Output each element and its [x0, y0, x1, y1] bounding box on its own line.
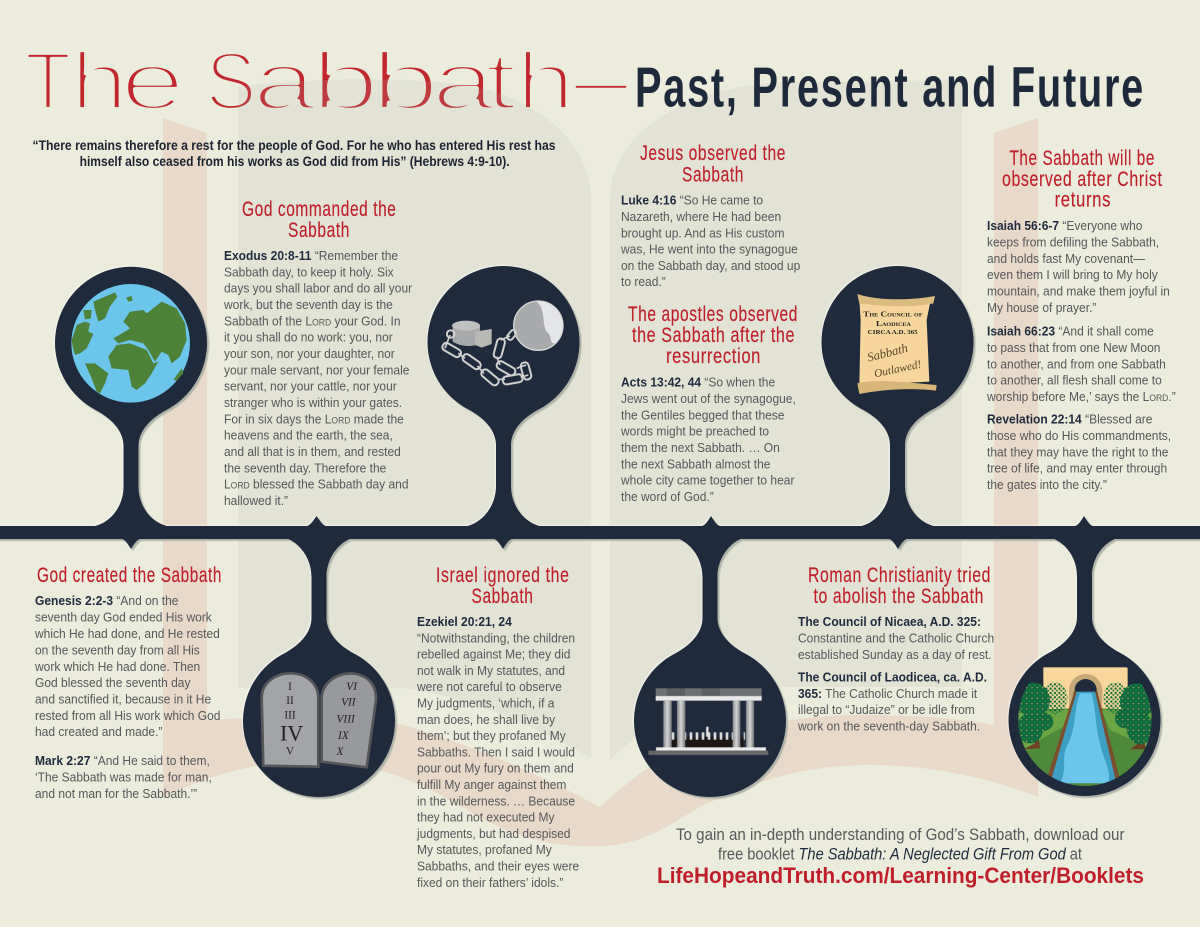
verses: hallowed it.”: [224, 493, 288, 508]
heading: God commanded the: [242, 198, 396, 221]
verses: to read.”: [621, 274, 666, 289]
verses: rebelled against Me; they did: [417, 647, 570, 662]
verses: heavens and the earth, the sea,: [224, 428, 393, 443]
icon: scroll: [857, 294, 937, 394]
verses: and holds fast My covenant—: [987, 251, 1145, 266]
verses: which He had done, and He rested: [34, 626, 220, 641]
verses: Sabbaths. Then I said I would: [417, 745, 575, 760]
panel: God commanded the Sabbath: [223, 198, 412, 508]
icon: garden with river: [1018, 667, 1152, 786]
verses: 365: The Catholic Church made it: [798, 686, 978, 701]
verses: God blessed the seventh day: [35, 675, 191, 690]
icon: temple with crowd: [648, 688, 768, 755]
heading: [242, 198, 396, 242]
verses: to another, all flesh shall come to: [987, 373, 1162, 388]
verses: and not man for the Sabbath.’”: [35, 786, 197, 801]
verses: man does, he shall live by: [417, 712, 556, 727]
verses: stranger who is within your gates.: [224, 395, 402, 410]
bubble: church: [634, 536, 786, 797]
verses: them the next Sabbath. … On: [621, 440, 780, 455]
verses: Luke 4:16 “So He came to: [621, 193, 763, 208]
verses: [620, 375, 796, 504]
heading: Sabbath: [472, 585, 534, 608]
verses: Lord blessed the Sabbath day and: [224, 477, 409, 492]
verses: was, He went into the synagogue: [620, 242, 798, 257]
verses: [797, 614, 994, 734]
decorative book left page: [238, 79, 591, 758]
heading: Jesus observed the: [640, 142, 786, 165]
verses: [620, 193, 800, 289]
verses: Mark 2:27 “And He said to them,: [35, 753, 210, 768]
title: The Sabbath: t: [485, 36, 517, 127]
verses: they had not executed My: [417, 810, 555, 825]
verses: keeps from defiling the Sabbath,: [987, 235, 1159, 250]
scripture quote: himself also ceased from his works as God did from His” (Hebrews 4:9-10).: [80, 153, 510, 169]
scripture quote: “There remains therefore a rest for the people of God. For he who has entered His rest has: [32, 137, 556, 153]
icon: ten commandments tablets: VIII: [337, 713, 356, 725]
verses: that they may have the right to the: [987, 445, 1168, 459]
verses: ‘The Sabbath was made for man,: [35, 770, 212, 785]
heading: returns: [1055, 189, 1111, 212]
icon: ten commandments tablets: V: [286, 745, 295, 757]
verses: even them I will bring to My holy: [987, 268, 1158, 282]
verses: My house of prayer.”: [987, 300, 1096, 315]
verses: mountain, and make them joyful in: [987, 284, 1170, 299]
heading: Israel ignored the: [436, 564, 570, 587]
panel: Roman Christianity tried to abolish the Sabbath: [797, 564, 994, 734]
timeline bar: [0, 526, 1200, 539]
verses: on the seventh day from all His: [35, 643, 200, 658]
verses: Jews went out of the synagogue,: [621, 391, 796, 406]
title: The Sabbath: e: [120, 36, 185, 127]
bubble: creation: [55, 267, 207, 527]
bubble: tablets: [243, 536, 395, 797]
icon: ten commandments tablets: VI: [346, 681, 358, 693]
timeline with bubbles: [0, 266, 1200, 797]
verses: the word of God.”: [621, 489, 714, 504]
verses: Sabbaths, and their eyes were: [417, 859, 579, 874]
verses: had created and made.”: [35, 724, 162, 739]
verses: tree of life, and may enter through: [987, 461, 1167, 476]
verses: Nazareth, where He had been: [621, 209, 781, 224]
heading: The apostles observed: [628, 303, 798, 326]
verses: judgments, but had despised: [416, 826, 570, 841]
verses: them’; but they profaned My: [417, 729, 566, 743]
verses: servant, nor your cattle, nor your: [224, 379, 397, 394]
verses: not walk in My statutes, and: [417, 663, 565, 678]
verses: fulfill My anger against them: [417, 777, 566, 792]
title: The Sabbath: b: [371, 35, 439, 127]
heading: [436, 564, 570, 608]
verses: Constantine and the Catholic Church: [798, 631, 994, 646]
verses: words might be preached to: [620, 424, 769, 439]
icon: ball and chain: [441, 301, 563, 387]
icon: ten commandments tablets: IX: [337, 730, 350, 742]
bubble: commandment: [428, 266, 580, 527]
heading: [640, 142, 786, 187]
heading: [628, 303, 798, 368]
panel: The apostles observed the Sabbath: [620, 303, 798, 504]
verses: in the wilderness. … Because: [417, 794, 575, 808]
verses: illegal to “Judaize” or be idle from: [798, 702, 975, 717]
heading: Sabbath: [288, 219, 350, 242]
verses: [34, 593, 220, 801]
icon: scroll: The Council of: [863, 310, 923, 319]
heading: God created the Sabbath: [37, 564, 222, 587]
verses: The Council of Laodicea, ca. A.D.: [798, 670, 987, 685]
verses: Sabbath of the Lord your God. In: [224, 314, 401, 328]
verses: the seventh day. Therefore the: [224, 461, 386, 475]
title: The Sabbath: h: [516, 35, 575, 127]
icon: ten commandments tablets: III: [284, 709, 296, 721]
verses: your son, nor your daughter, nor: [224, 346, 395, 361]
verses: Sabbath day, to keep it holy. Six: [224, 265, 394, 279]
title: The Sabbath: a: [252, 35, 317, 127]
panel: Israel ignored the Sabbath: [416, 564, 579, 890]
bubble: Laodicea: [822, 266, 974, 527]
verses: to pass that from one New Moon: [987, 340, 1160, 355]
icon: scroll: Outlawed!: [873, 359, 923, 380]
heading: Sabbath: [682, 164, 744, 187]
icon: ten commandments tablets: [262, 673, 376, 767]
heading: [1002, 147, 1162, 212]
verses: My statutes, profaned My: [417, 843, 552, 857]
verses: were not careful to observe: [416, 680, 562, 694]
title: The Sabbath: a: [432, 35, 496, 127]
panel: Jesus observed the Sabbath: [620, 142, 800, 289]
verses: “Notwithstanding, the children: [417, 631, 575, 645]
verses: those who do His commandments,: [987, 428, 1171, 443]
scripture quote: [32, 137, 556, 169]
icon: scroll: CIRCA A.D. 365: [868, 329, 918, 336]
verses: your male servant, nor your female: [224, 363, 409, 377]
verses: brought up. And as His custom: [621, 226, 784, 240]
decorative open book peach outline: [163, 118, 1038, 846]
verses: seventh day God ended His work: [35, 610, 212, 625]
heading: to abolish the Sabbath: [814, 585, 984, 608]
panel: The Sabbath will be observed after Christ returns: [986, 147, 1176, 492]
verses: work on the seventh-day Sabbath.: [797, 719, 980, 734]
verses: the gates into the city.”: [987, 477, 1107, 492]
heading: resurrection: [666, 345, 761, 368]
decorative book right page: [610, 80, 962, 760]
verses: the next Sabbath almost the: [621, 457, 770, 471]
verses: and all that is in them, and rested: [224, 444, 401, 459]
booklet link: LifeHopeandTruth.com/Learning-Center/Booklets: [657, 863, 1144, 888]
title: The Sabbath: T: [25, 35, 71, 126]
verses: Exodus 20:8-11 “Remember the: [224, 248, 398, 263]
verses: to another, and from one Sabbath: [987, 357, 1166, 371]
icon: ten commandments tablets: I: [288, 681, 292, 693]
heading: [808, 564, 991, 608]
call to action: [657, 826, 1144, 888]
verses: on the Sabbath day, and stood up: [621, 258, 800, 273]
cusps on bar: [117, 516, 1098, 549]
verses: Isaiah 56:6-7 “Everyone who: [987, 218, 1142, 233]
verses: Genesis 2:2-3 “And on the: [35, 593, 178, 608]
title: The Sabbath: —: [575, 54, 627, 112]
call to action: free booklet The Sabbath: A Neglected Gift From God at: [718, 846, 1082, 864]
verses: [986, 218, 1176, 492]
bubble: garden: [1008, 536, 1160, 796]
call to action: To gain an in-depth understanding of God’s Sabbath, download our: [676, 826, 1125, 844]
icon: ten commandments tablets: IV: [280, 721, 303, 746]
verses: work, but the seventh day is the: [223, 297, 393, 312]
verses: work which He had done. Then: [34, 659, 200, 674]
icon: scroll: Sabbath: [866, 341, 909, 365]
verses: pour out My fury on them and: [417, 761, 574, 776]
verses: Isaiah 66:23 “And it shall come: [987, 324, 1154, 339]
verses: [416, 614, 579, 890]
verses: worship before Me,’ says the Lord.”: [986, 389, 1176, 404]
verses: rested from all His work which God: [35, 708, 220, 723]
verses: Acts 13:42, 44 “So when the: [621, 375, 775, 390]
verses: established Sunday as a day of rest.: [798, 647, 991, 662]
verses: The Council of Nicaea, A.D. 325:: [798, 614, 981, 629]
verses: Ezekiel 20:21, 24: [417, 614, 512, 629]
title: The Sabbath: b: [311, 35, 379, 127]
heading: the Sabbath after the: [632, 324, 795, 347]
verses: days you shall labor and do all your: [224, 281, 412, 296]
icon: ten commandments tablets: II: [286, 695, 294, 707]
title: The Sabbath: S: [206, 34, 256, 126]
verses: the Gentiles begged that these: [621, 408, 784, 422]
verses: whole city came together to hear: [620, 473, 794, 488]
verses: it you shall do no work: you, nor: [224, 330, 393, 345]
verses: and sanctified it, because in it He: [35, 692, 211, 707]
icon: ten commandments tablets: X: [336, 746, 345, 758]
icon: globe: [71, 284, 190, 403]
verses: [223, 248, 412, 508]
heading: Roman Christianity tried: [808, 564, 991, 587]
title: The Sabbath: h: [70, 35, 128, 126]
verses: For in six days the Lord made the: [224, 412, 404, 426]
verses: Revelation 22:14 “Blessed are: [987, 412, 1152, 427]
title: The Sabbath: [25, 34, 627, 127]
icon: ten commandments tablets: VII: [341, 697, 357, 709]
icon: scroll: Laodicea: [876, 319, 911, 328]
verses: fixed on their fathers’ idols.”: [417, 875, 563, 890]
panel: God created the Sabbath: [34, 564, 222, 801]
verses: My judgments, ‘which, if a: [417, 696, 555, 711]
